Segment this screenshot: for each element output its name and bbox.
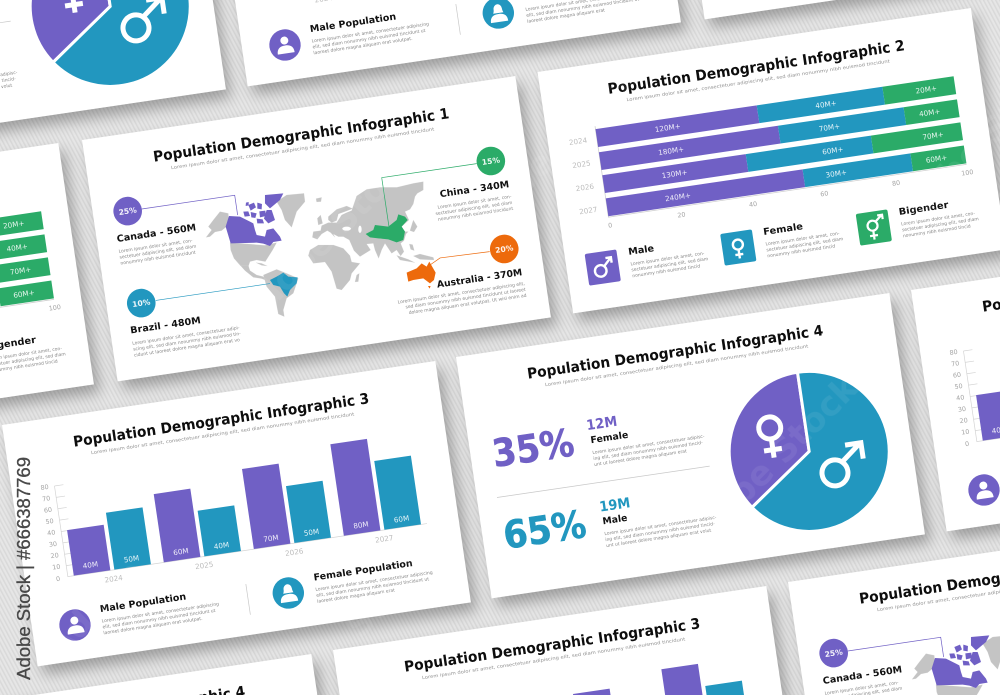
map: Australia highlighted xyxy=(407,262,436,289)
Canada heading: Canada - 560M xyxy=(822,664,903,687)
bar 2026: 130M+ xyxy=(661,168,688,180)
bar 2025 xyxy=(599,99,960,170)
male population text: elit, sed diam nonummy nibh euismod tincidunt ut xyxy=(312,28,426,50)
China text: sectetuer adipiscing elit, sed diam xyxy=(435,200,513,217)
bar 2027 xyxy=(606,146,966,216)
female text: ing elit, sed diam nonummy nibh euismod tincid- xyxy=(593,440,703,462)
bars 2025: 60M xyxy=(173,546,189,557)
male text: unt ut laoreet dolore magna aliquam erat volut xyxy=(606,528,712,549)
y axis labels: 0 xyxy=(55,575,61,583)
China callout: 15% xyxy=(481,155,501,167)
Bigender text: Lorem ipsum dolor sit amet, con- xyxy=(901,211,976,227)
Bigender text: sectetuer adipiscing elit, sed diam xyxy=(902,216,979,233)
y axis labels: 0 xyxy=(964,440,970,448)
male text: Lorem ipsum dolor sit amet, consectetuer adipisc- xyxy=(604,515,717,537)
subtitle: Lorem ipsum dolor sit amet, consectetuer adipiscing elit, sed diam nonummy nibh euismod tincidunt xyxy=(626,58,890,103)
Female text: Lorem ipsum dolor sit amet, con- xyxy=(765,231,840,247)
bar 2024: 20M+ xyxy=(915,84,937,96)
Male text: sectetuer adipiscing elit, sed diam xyxy=(631,256,709,273)
male population heading: Male Population xyxy=(309,12,397,35)
year labels xyxy=(104,533,394,585)
Bigender text: nonummy nibh euismod tincid xyxy=(902,223,971,239)
y axis labels xyxy=(949,348,972,449)
year labels: 2027 xyxy=(579,205,598,216)
bars 2025: 40M xyxy=(213,540,230,551)
panel: bottom-right map slide (cropped) xyxy=(788,518,1000,695)
icon: female person xyxy=(480,0,516,31)
y axis labels: 60 xyxy=(43,506,53,515)
Male text: nonummy nibh euismod tincid xyxy=(632,263,701,279)
panel: Population Demographic Infographic 1 xyxy=(82,76,551,381)
bars 2025 xyxy=(154,483,241,562)
y axis labels: 60 xyxy=(952,371,962,380)
bar 2026: 60M+ xyxy=(822,144,844,157)
green bar labels xyxy=(3,219,35,300)
y axis labels: 50 xyxy=(45,517,54,526)
axis and ticks xyxy=(963,298,1000,442)
panel: bottom-centre slide (cropped) xyxy=(333,586,802,695)
Australia callout: 20% xyxy=(495,243,514,255)
icon: bigender square xyxy=(856,209,892,246)
axis and ticks xyxy=(54,433,427,577)
Canada callout: 25% xyxy=(118,205,138,217)
year labels: 2025 xyxy=(572,159,591,170)
bars 2027: 80M xyxy=(353,519,369,531)
male population text: laoreet dolore magna aliquam erat volutpat. xyxy=(313,36,413,56)
y axis labels: 70 xyxy=(951,359,960,368)
Canada text: Lorem ipsum dolor sit amet, con- xyxy=(118,238,193,255)
Brazil callout xyxy=(125,270,272,319)
divider line xyxy=(0,21,11,53)
bar 2026: 70M+ xyxy=(922,130,944,142)
panel: top-centre bar chart slide (cropped) xyxy=(212,0,681,86)
x axis labels: 80 xyxy=(891,179,901,188)
panel: top-left pie slide (cropped) xyxy=(0,0,226,153)
Canada callout xyxy=(111,181,238,233)
icon: female square xyxy=(720,229,756,266)
axis end label: 100 xyxy=(48,303,61,313)
map: Canada highlighted xyxy=(932,635,989,688)
Australia heading: Australia - 370M xyxy=(436,267,523,291)
panel: bottom-left slide (cropped) xyxy=(0,654,347,695)
y axis labels: 70 xyxy=(42,494,51,503)
bar 2027: 240M+ xyxy=(664,191,691,203)
Brazil text: Lorem ipsum dolor sit amet, consectetuer adipi- xyxy=(132,325,240,347)
y axis labels: 50 xyxy=(954,382,963,391)
Male text: Lorem ipsum dolor sit amet, con- xyxy=(630,251,705,267)
x axis labels: 40 xyxy=(749,200,758,209)
stock image watermark id: Adobe Stock | #666387769 xyxy=(13,457,34,680)
bars 2024 xyxy=(65,507,151,576)
map: China highlighted xyxy=(366,214,408,242)
Canada callout: 25% xyxy=(824,647,844,659)
bars xyxy=(571,658,752,695)
female text: unt ut laoreet dolore magna aliquam erat xyxy=(594,448,687,468)
y axis labels: 40 xyxy=(956,393,965,403)
female population text: laoreet dolore magna aliquam erat xyxy=(527,7,606,25)
China text: Lorem ipsum dolor sit amet, con- xyxy=(437,194,512,211)
bars 2024: 50M xyxy=(123,553,140,564)
panel: top-right slide (cropped blank edge) xyxy=(669,0,1000,19)
year labels xyxy=(568,135,598,216)
stacked bar chart xyxy=(567,72,974,234)
panel: Population Demographic Infographic 2 xyxy=(538,8,1000,313)
Male Population text: Lorem ipsum dolor sit amet, consectetuer adipiscing xyxy=(101,601,220,624)
China callout xyxy=(380,145,513,228)
female percentage: 35% xyxy=(489,420,577,476)
Male Population heading: Male Population xyxy=(99,592,187,615)
male count: 19M xyxy=(598,495,631,516)
axis line xyxy=(0,299,54,352)
panel: left stacked-bar slide (cropped) xyxy=(0,143,94,448)
Australia text: Lorem ipsum dolor sit amet, consectetuer adipiscing elit, xyxy=(397,281,525,306)
x axis labels: 100 xyxy=(961,168,974,178)
axes xyxy=(595,73,967,217)
China heading: China - 340M xyxy=(439,179,510,200)
bars 2026 xyxy=(242,458,331,549)
Female Population heading: Female Population xyxy=(313,558,413,584)
title: Population Demographic Infographic 1 xyxy=(152,105,450,166)
pie chart xyxy=(718,361,900,542)
year labels: 2026 xyxy=(575,182,595,193)
Male Population text: elit, sed diam nonummy nibh euismod tincidunt ut xyxy=(102,608,216,630)
female text: Lorem ipsum dolor sit amet, consectetuer adipisc- xyxy=(592,434,705,456)
year labels: 2024 xyxy=(104,573,124,585)
subtitle: Lorem ipsum dolor sit amet, consectetuer adipiscing elit, sed diam nonummy nibh euismod tincidunt xyxy=(545,343,809,388)
decorative faint watermarks: Stock xyxy=(338,542,443,646)
bar chart xyxy=(40,429,429,592)
year labels: 2024 xyxy=(568,135,588,147)
y axis labels: 80 xyxy=(40,483,49,492)
Canada callout xyxy=(817,623,944,675)
Female heading: Female xyxy=(763,221,804,238)
y axis labels: 20 xyxy=(959,416,968,425)
green bar labels: 20M+ xyxy=(3,219,25,231)
female count: 12M xyxy=(585,414,618,434)
China text: nonummy nibh euismod tincidunt xyxy=(438,206,514,223)
bars 2027: 60M xyxy=(393,513,410,525)
icon: male person xyxy=(57,607,93,643)
y axis labels: 10 xyxy=(52,563,61,572)
x axis labels: 0 xyxy=(608,221,613,230)
Female text: sectetuer adipiscing elit, sed diam xyxy=(766,236,844,253)
green bar segments xyxy=(0,211,54,312)
Female Population text: laoreet dolore magna aliquam erat xyxy=(317,587,396,605)
female label: Female xyxy=(590,430,629,446)
pie chart xyxy=(19,0,201,97)
icon: male person xyxy=(267,27,303,63)
Female Population text: elit, sed diam nonummy nibh euismod tincidunt ut xyxy=(316,576,430,599)
Brazil text: cidunt ut laoreet dolore magna aliquam erat vo xyxy=(134,337,241,359)
bars 2027 xyxy=(330,433,421,536)
Australia callout xyxy=(427,233,520,274)
male label: Male xyxy=(602,513,628,527)
decorative faint watermarks: Adobe Stock xyxy=(448,57,647,256)
icon: male symbol xyxy=(818,443,867,488)
male percentage: 65% xyxy=(500,502,589,558)
bar 2024 xyxy=(595,76,956,147)
bar 2027: 60M+ xyxy=(925,153,948,165)
green bar labels: 40M+ xyxy=(6,242,28,254)
decorative faint watermarks: Adobe Stock xyxy=(228,137,427,336)
map: Brazil highlighted xyxy=(270,273,298,297)
bars 2026: 50M xyxy=(303,527,320,538)
bar 2025: 70M+ xyxy=(818,121,841,133)
divider xyxy=(246,584,250,615)
bar 2025: 40M+ xyxy=(918,107,941,119)
first bar xyxy=(976,390,1000,441)
Australia text: dolore magna aliquam erat volutpat. Ut wisi enim ad xyxy=(408,293,527,316)
x axis labels: 20 xyxy=(677,210,686,220)
bar 2024: 120M+ xyxy=(654,121,681,134)
male population text: Lorem ipsum dolor sit amet, consectetuer adipiscing xyxy=(311,21,430,44)
decorative faint watermarks: Adobe xyxy=(38,552,152,666)
title: Population Demographic Infographic 4 xyxy=(526,322,824,383)
map: Canada highlighted xyxy=(226,193,283,246)
Canada text: nonummy nibh euismod tincidunt xyxy=(120,250,196,267)
subtitle: Lorem ipsum dolor sit amet, consectetuer adipiscing elit, sed diam nonummy nibh euismod tincidunt xyxy=(422,636,686,681)
world map (cropped) xyxy=(912,635,1000,695)
icon: female symbol on pie xyxy=(58,0,86,14)
x axis labels xyxy=(608,168,974,230)
bars 2026: 70M xyxy=(263,533,279,544)
male text: ing elit, sed diam nonummy nibh euismod tincid- xyxy=(605,521,715,543)
year labels: 2026 xyxy=(285,546,304,558)
title: Population Demographic Infographic 3 xyxy=(403,615,701,676)
Male Population text: laoreet dolore magna aliquam erat volutpat. xyxy=(103,616,203,636)
Male heading: Male xyxy=(628,243,655,258)
panel: right bar chart slide (cropped) xyxy=(911,226,1000,531)
world map xyxy=(206,182,436,317)
title: Population Demographic Infographic 2 xyxy=(607,37,906,98)
y axis labels: 30 xyxy=(957,405,967,414)
year labels: 2027 xyxy=(375,533,394,545)
Brazil text: scing elit, sed diam nonummy nibh euismod tin- xyxy=(133,331,242,353)
green bar labels: 60M+ xyxy=(13,288,35,300)
Brazil heading: Brazil - 480M xyxy=(130,315,201,336)
bar 2024: 40M+ xyxy=(815,98,837,110)
icon: female symbol xyxy=(757,415,785,459)
divider xyxy=(456,4,460,35)
y axis labels: 80 xyxy=(949,348,958,357)
bar 2026 xyxy=(602,122,963,193)
panel: Population Demographic Infographic 3 xyxy=(2,361,471,666)
x axis labels: 60 xyxy=(820,189,829,198)
y axis labels: 30 xyxy=(48,540,58,549)
y axis labels: 20 xyxy=(50,551,59,560)
subtitle: Lorem ipsum dolor sit amet, consectetuer adipiscing elit, sed diam nonummy nibh euismod tincidunt xyxy=(171,126,435,171)
bar 2025: 180M+ xyxy=(658,144,685,157)
bars 2024: 40M xyxy=(82,559,99,571)
Canada text: sectetuer adipiscing elit, sed diam xyxy=(119,243,197,261)
bar 2027: 30M+ xyxy=(825,168,847,180)
y axis labels: 40 xyxy=(47,528,56,538)
icon: female person xyxy=(270,575,306,611)
title: Population Demographic Infographic 3 xyxy=(72,390,370,451)
y axis labels: 10 xyxy=(961,428,970,437)
Canada heading: Canada - 560M xyxy=(116,222,197,245)
icon: male person xyxy=(966,472,1000,508)
panel: Population Demographic Infographic 4 xyxy=(456,293,925,598)
Bigender heading: Bigender xyxy=(898,200,950,218)
y axis labels xyxy=(40,483,63,584)
Female text: nonummy nibh euismod tincid xyxy=(767,243,836,259)
year labels: 2025 xyxy=(194,560,214,571)
icon: male square xyxy=(585,249,621,286)
Australia text: sed diam nonummy nibh euismod tincidunt ut laoreet xyxy=(405,287,526,310)
Female Population text: Lorem ipsum dolor sit amet, consectetuer adipiscing xyxy=(315,570,433,593)
subtitle: Lorem ipsum dolor sit amet, consectetuer adipiscing elit, sed diam nonummy nibh euismod tincidunt xyxy=(91,411,355,456)
icon: male symbol on pie xyxy=(119,0,168,43)
green bar labels: 70M+ xyxy=(9,265,32,277)
decorative faint watermarks: Adobe Stock xyxy=(668,367,867,566)
Brazil callout: 10% xyxy=(132,297,151,309)
